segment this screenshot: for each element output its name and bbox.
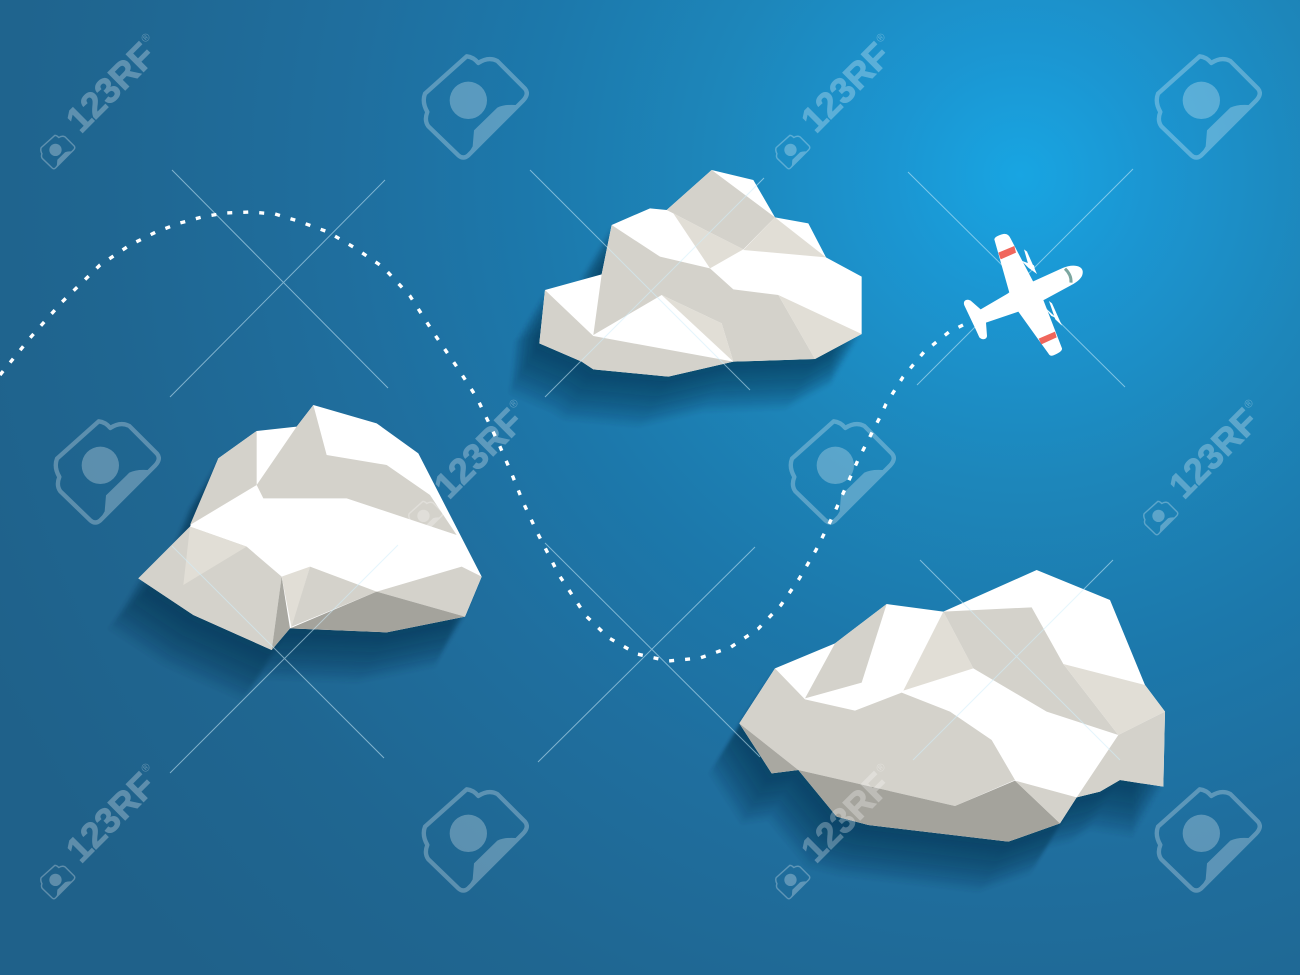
watermark: 123RF row 1 centre right: 123RF [793, 35, 898, 140]
watermark: 123RF row 1 left: ® [139, 31, 153, 45]
watermark: egg icon row 1 right [1157, 56, 1260, 157]
watermark: 123RF row 3 centre right: 123RF [793, 765, 898, 870]
watermark: egg icon row 3 right [1157, 789, 1260, 890]
watermark: 123RF row 2 right: ® [1242, 397, 1256, 411]
watermark: 123RF row 3 centre right [755, 758, 914, 916]
watermark: 123RF row 1 left [20, 28, 179, 186]
watermark: 123RF row 3 left [20, 758, 179, 916]
engines and propellers [1021, 249, 1062, 326]
watermark: 123RF row 1 left: 123RF [58, 35, 163, 140]
cloud long shadow [108, 410, 479, 700]
watermark: 123RF row 3 centre right: ® [874, 761, 888, 775]
wing stripes [998, 246, 1057, 344]
watermark: 123RF row 1 centre right [755, 28, 914, 186]
windshield [1065, 269, 1071, 283]
dashed flight path [0, 212, 963, 661]
cloud facets [739, 604, 1165, 842]
cloud facets [138, 405, 482, 650]
airplane [964, 234, 1083, 356]
cloud body [739, 570, 1165, 842]
fuselage [964, 266, 1083, 339]
watermark: egg icon row 1 [424, 56, 527, 157]
watermark: egg icon row 3 [424, 789, 527, 890]
watermark: 123RF row 2 centre left: 123RF [426, 401, 531, 506]
watermark: 123RF row 2 right: 123RF [1161, 401, 1266, 506]
watermark: 123RF row 3 left: 123RF [58, 765, 163, 870]
cloud long shadow [509, 175, 859, 427]
cloud: bottom right [709, 570, 1165, 892]
cloud facets [539, 170, 862, 377]
cloud: top centre [509, 170, 862, 427]
cloud body [539, 170, 862, 377]
cloud: left [108, 405, 482, 700]
watermark: 123RF row 1 centre right: ® [874, 31, 888, 45]
watermark: 123RF row 2 centre left [388, 394, 547, 552]
watermark: 123RF row 2 right [1123, 394, 1282, 552]
wings [994, 234, 1062, 356]
thin cross lines overlay [170, 169, 1133, 773]
cloud long shadow [709, 575, 1162, 892]
watermark: 123RF row 2 centre left: ® [507, 397, 521, 411]
watermark: egg icon row 2 left [56, 421, 159, 522]
cloud body [138, 405, 482, 650]
watermark: 123RF row 3 left: ® [139, 761, 153, 775]
watermark: egg icon row 2 centre right [791, 421, 894, 522]
